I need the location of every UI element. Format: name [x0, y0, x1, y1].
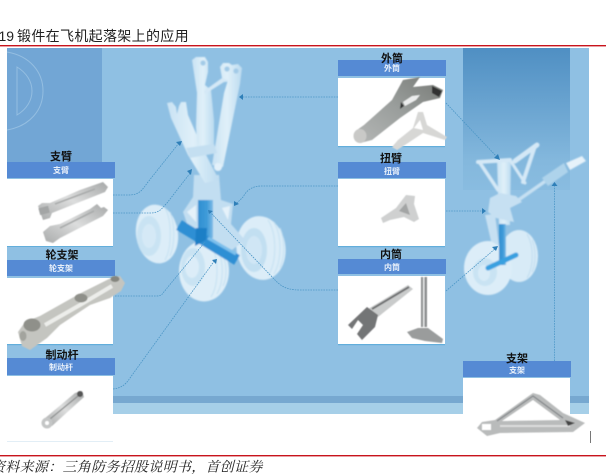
panel: 制动杆 [7, 348, 115, 442]
side strut [517, 180, 547, 201]
header rule [0, 45, 606, 46]
leader arrows [113, 97, 554, 389]
panel: 扭臂: 扭臂 [384, 166, 400, 176]
panel: 内筒 [338, 247, 446, 345]
panel: 内筒: 内筒 [384, 262, 400, 272]
label: 内筒: 内筒 [380, 247, 402, 261]
strut: main cylinder [192, 57, 214, 156]
label: 轮支架: 轮支架 [46, 248, 78, 262]
panel: 外筒: 外筒 [384, 63, 400, 73]
footer rule [0, 455, 606, 456]
wheel: front [179, 240, 229, 302]
panel: 扭臂 [338, 151, 446, 247]
panel: 外筒 [338, 51, 447, 150]
panel: 支架 [463, 351, 591, 446]
panel: 制动杆: 制动杆 [49, 362, 73, 372]
part: bogie [18, 276, 125, 350]
part: torque link [381, 195, 419, 223]
part: outer cylinder [354, 77, 447, 150]
label: 支臂: 支臂 [50, 149, 72, 163]
panel: 支臂 [7, 149, 115, 246]
right landing gear illustration [464, 145, 586, 295]
panel: 支架: 支架 [509, 365, 525, 375]
centre column [497, 160, 511, 225]
top frame [478, 145, 537, 190]
blue cylinder [499, 224, 506, 265]
part: bracket [477, 393, 585, 436]
joints [488, 193, 522, 222]
strut: left arm [167, 102, 219, 183]
left landing gear illustration [132, 57, 290, 302]
label: 扭臂: 扭臂 [380, 151, 402, 165]
blue axle [179, 225, 237, 260]
part: inner cylinder [348, 277, 443, 343]
label: 支架: 支架 [506, 351, 528, 365]
panel: main blue background [7, 48, 589, 414]
blue cylinder [198, 200, 213, 238]
part: brake rod [42, 391, 84, 428]
wheel: right gear rear [500, 230, 538, 282]
title: 锻件在飞机起落架上的应用 [17, 28, 189, 44]
blue axle [488, 255, 516, 268]
wheel: left [132, 202, 182, 266]
panel: 支臂: 支臂 [53, 165, 69, 175]
wheel: right [232, 213, 290, 283]
strut: right yoke [212, 63, 242, 167]
panel: 轮支架 [7, 246, 125, 350]
arrow heads [176, 94, 558, 264]
wheel: right gear front [464, 241, 512, 295]
lower link [485, 214, 499, 246]
lower housing [183, 175, 245, 250]
panel: 轮支架: 轮支架 [49, 263, 73, 273]
part: arms [38, 182, 108, 243]
label: 制动杆: 制动杆 [46, 348, 78, 362]
brace [204, 78, 240, 94]
label: 外筒: 外筒 [381, 51, 403, 65]
